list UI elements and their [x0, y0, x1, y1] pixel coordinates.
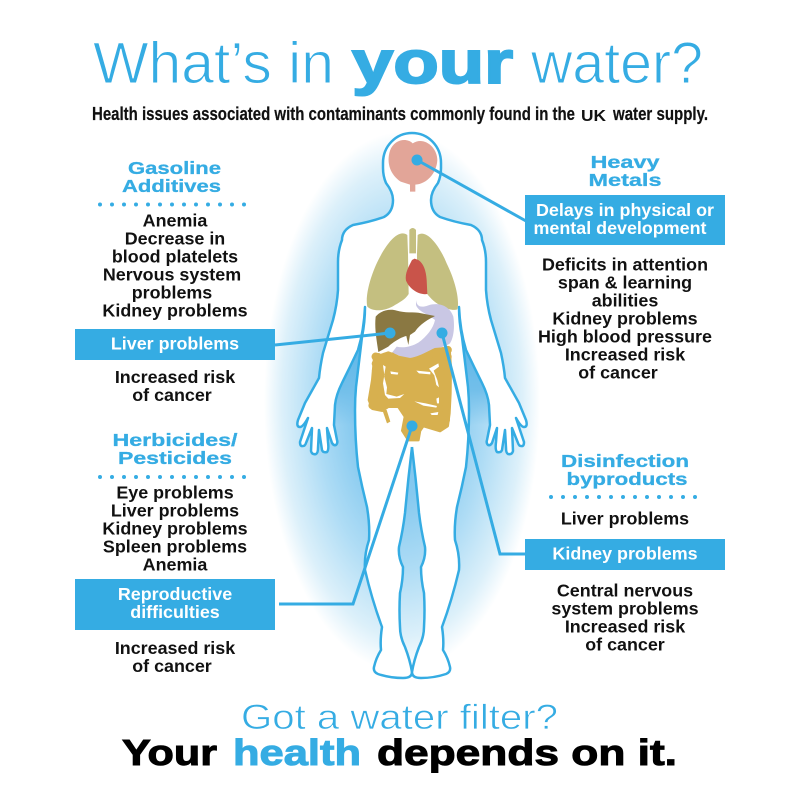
callout: kidney problems: Kidney problems — [552, 544, 698, 564]
connector: reproductive — [279, 420, 418, 604]
title: water? — [530, 31, 703, 96]
list: Spleen problems — [103, 536, 247, 556]
organ: brain — [389, 140, 437, 192]
list: Kidney problems — [552, 308, 698, 328]
heading — [561, 451, 689, 489]
list: Increased risk — [115, 638, 235, 658]
list: Increased risk — [565, 344, 685, 364]
subtitle: water supply. — [612, 104, 708, 124]
list: Nervous system — [103, 264, 241, 284]
organ: liver — [375, 310, 435, 352]
body outline left half — [297, 133, 412, 678]
list: Anemia — [143, 554, 208, 574]
callout: reproductive difficulties — [75, 579, 275, 630]
subtitle: Health issues associated with contaminants commonly found in the — [92, 104, 575, 124]
list: span & learning — [558, 272, 692, 292]
panel: herbicides and pesticides — [75, 430, 275, 676]
footer question: Got a water filter? — [241, 698, 558, 737]
panel: disinfection byproducts — [525, 451, 725, 654]
list: abilities — [592, 290, 658, 310]
list — [115, 638, 235, 676]
list: of cancer — [578, 362, 658, 382]
footer statement: Your — [122, 732, 217, 773]
list: Eye problems — [116, 482, 234, 502]
body figure — [264, 132, 540, 678]
organs lower — [369, 300, 454, 440]
panel: heavy metals — [525, 152, 725, 382]
body outline right half — [412, 133, 527, 678]
list: Liver problems — [561, 508, 689, 528]
list: system problems — [551, 598, 699, 618]
heading — [122, 158, 221, 196]
heading: byproducts — [566, 469, 688, 489]
subtitle: UK — [581, 108, 606, 125]
footer statement — [122, 732, 677, 773]
organ: trachea — [409, 228, 416, 253]
list: Decrease in — [125, 228, 225, 248]
connector: kidney — [436, 328, 526, 554]
list: Deficits in attention — [542, 254, 708, 274]
heading: Herbicides/ — [112, 430, 238, 450]
heading — [588, 152, 662, 190]
list: Kidney problems — [102, 300, 248, 320]
callout: reproductive difficulties: Reproductive — [118, 584, 232, 604]
connector: liver — [275, 328, 396, 345]
list: problems — [132, 282, 212, 302]
callout: kidney problems — [525, 539, 725, 570]
list: Central nervous — [557, 580, 693, 600]
title: your — [352, 29, 513, 96]
heading — [112, 430, 238, 468]
organ: lungs — [367, 233, 458, 310]
heading: Metals — [588, 170, 662, 190]
list: of cancer — [132, 656, 212, 676]
list: blood platelets — [112, 246, 238, 266]
heading: Gasoline — [128, 158, 221, 178]
list: of cancer — [132, 385, 212, 405]
list: Liver problems — [111, 500, 239, 520]
footer statement: health — [233, 732, 361, 773]
footer statement: depends on it. — [377, 732, 677, 773]
list — [115, 367, 235, 405]
heading: Additives — [122, 176, 221, 196]
callout: liver problems: Liver problems — [111, 334, 239, 354]
callout: liver problems — [75, 329, 275, 360]
list: Increased risk — [115, 367, 235, 387]
intestine gaps — [383, 363, 439, 415]
background glow — [264, 132, 540, 672]
list: Anemia — [143, 210, 208, 230]
panel: gasoline additives — [75, 158, 275, 405]
list — [538, 254, 712, 382]
heading: Pesticides — [118, 448, 232, 468]
heading: Heavy — [590, 152, 660, 172]
organ: heart — [406, 259, 427, 294]
list — [102, 482, 248, 574]
list — [102, 210, 248, 320]
title: What’s in — [93, 31, 334, 96]
callout: developmental delays: Delays in physical or — [536, 200, 714, 220]
callout: developmental delays — [525, 195, 725, 245]
heading: Disinfection — [561, 451, 689, 471]
callout: reproductive difficulties: difficulties — [130, 602, 220, 622]
organ: stomach — [391, 300, 454, 358]
list: of cancer — [585, 634, 665, 654]
list: Kidney problems — [102, 518, 248, 538]
list — [551, 580, 699, 654]
callout: developmental delays: mental development — [534, 218, 707, 238]
organ: intestines — [369, 348, 451, 440]
arm gap shading left — [335, 307, 365, 425]
arm gap shading right — [459, 307, 489, 425]
list: Increased risk — [565, 616, 685, 636]
list: High blood pressure — [538, 326, 712, 346]
organs upper — [367, 140, 458, 310]
title — [93, 29, 703, 96]
connector: brain to developmental delays — [412, 154, 526, 221]
